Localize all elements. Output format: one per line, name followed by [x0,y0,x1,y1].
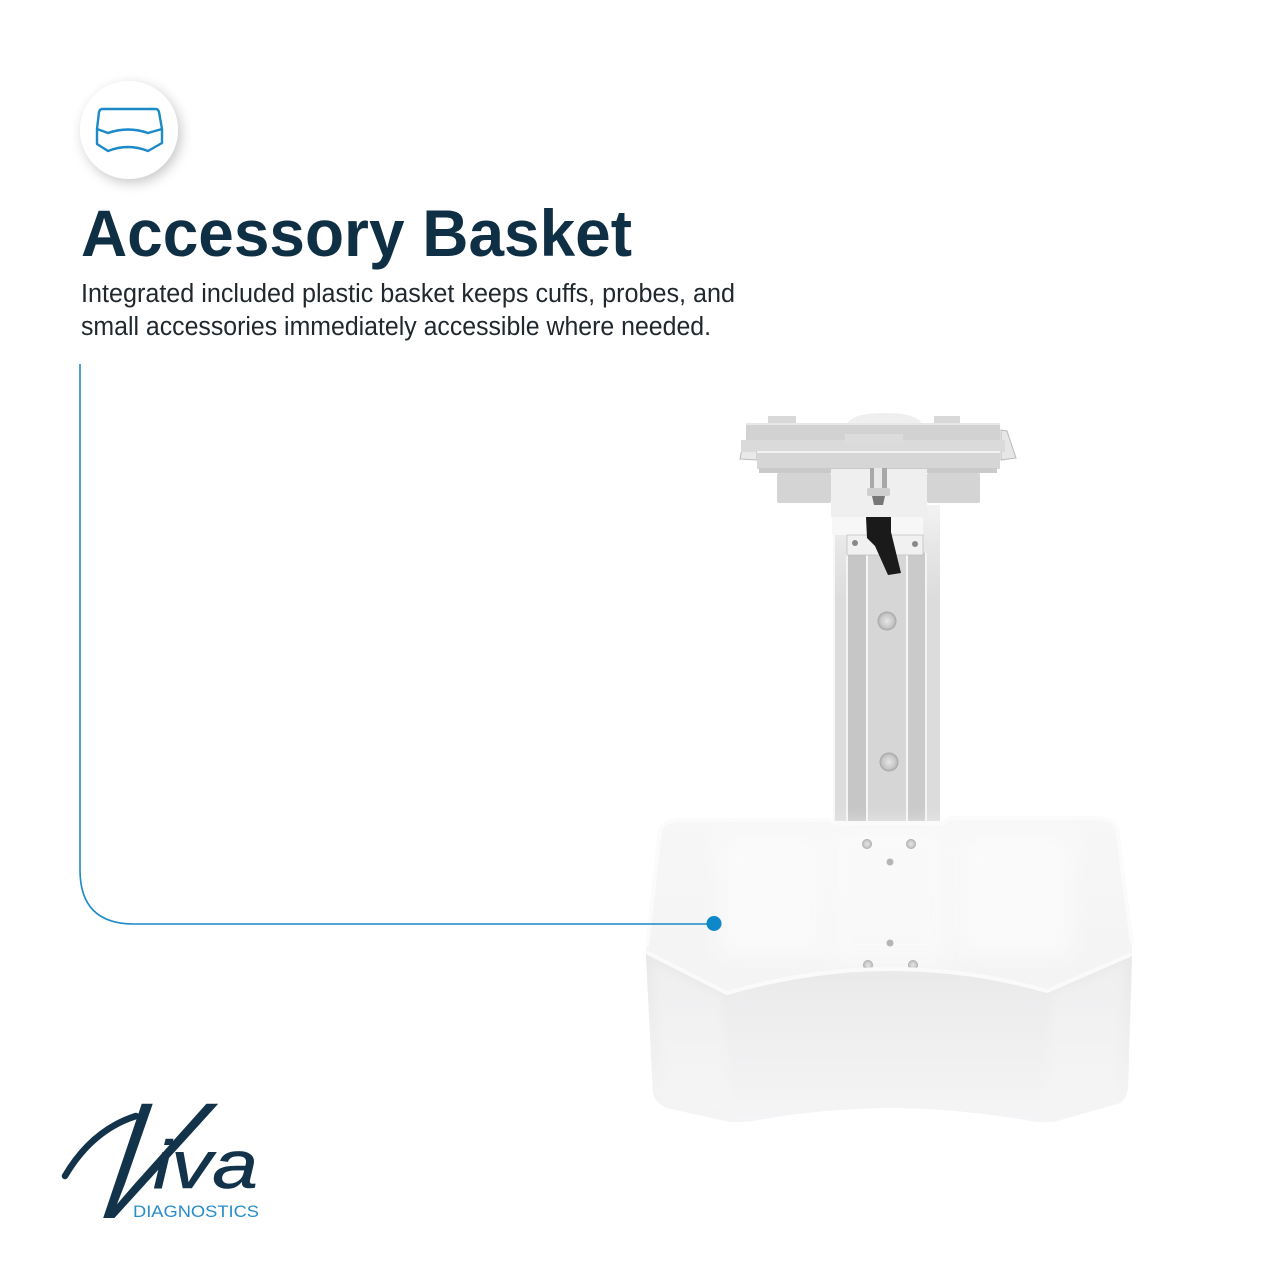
top mounting plate [740,413,1016,503]
inner wall shading [722,826,1070,966]
pole [833,505,940,823]
logo script wordmark: iva [153,1127,258,1203]
product: mount arm [740,413,1016,823]
front corner highlights [652,962,1126,1116]
description text: small accessories immediately accessible where needed. [81,313,711,341]
title: Accessory Basket [81,196,632,270]
front face [646,950,1132,1122]
description text: Integrated included plastic basket keeps cuffs, probes, and [81,280,735,308]
clamp block [831,468,927,555]
logo [59,1067,259,1254]
top rim highlight [647,818,1132,947]
callout leader line [80,364,714,924]
logo subtitle: DIAGNOSTICS [133,1203,259,1221]
product: accessory basket [646,818,1132,1122]
logo script wordmark: V [59,1067,236,1254]
icon: basket badge [80,81,178,179]
logo flourish [65,1116,136,1176]
description text [81,280,735,341]
mounting screws [862,839,918,970]
front rim [646,952,1132,993]
callout dot [706,916,722,931]
locking handle [866,517,901,575]
basket silhouette [646,818,1132,1122]
